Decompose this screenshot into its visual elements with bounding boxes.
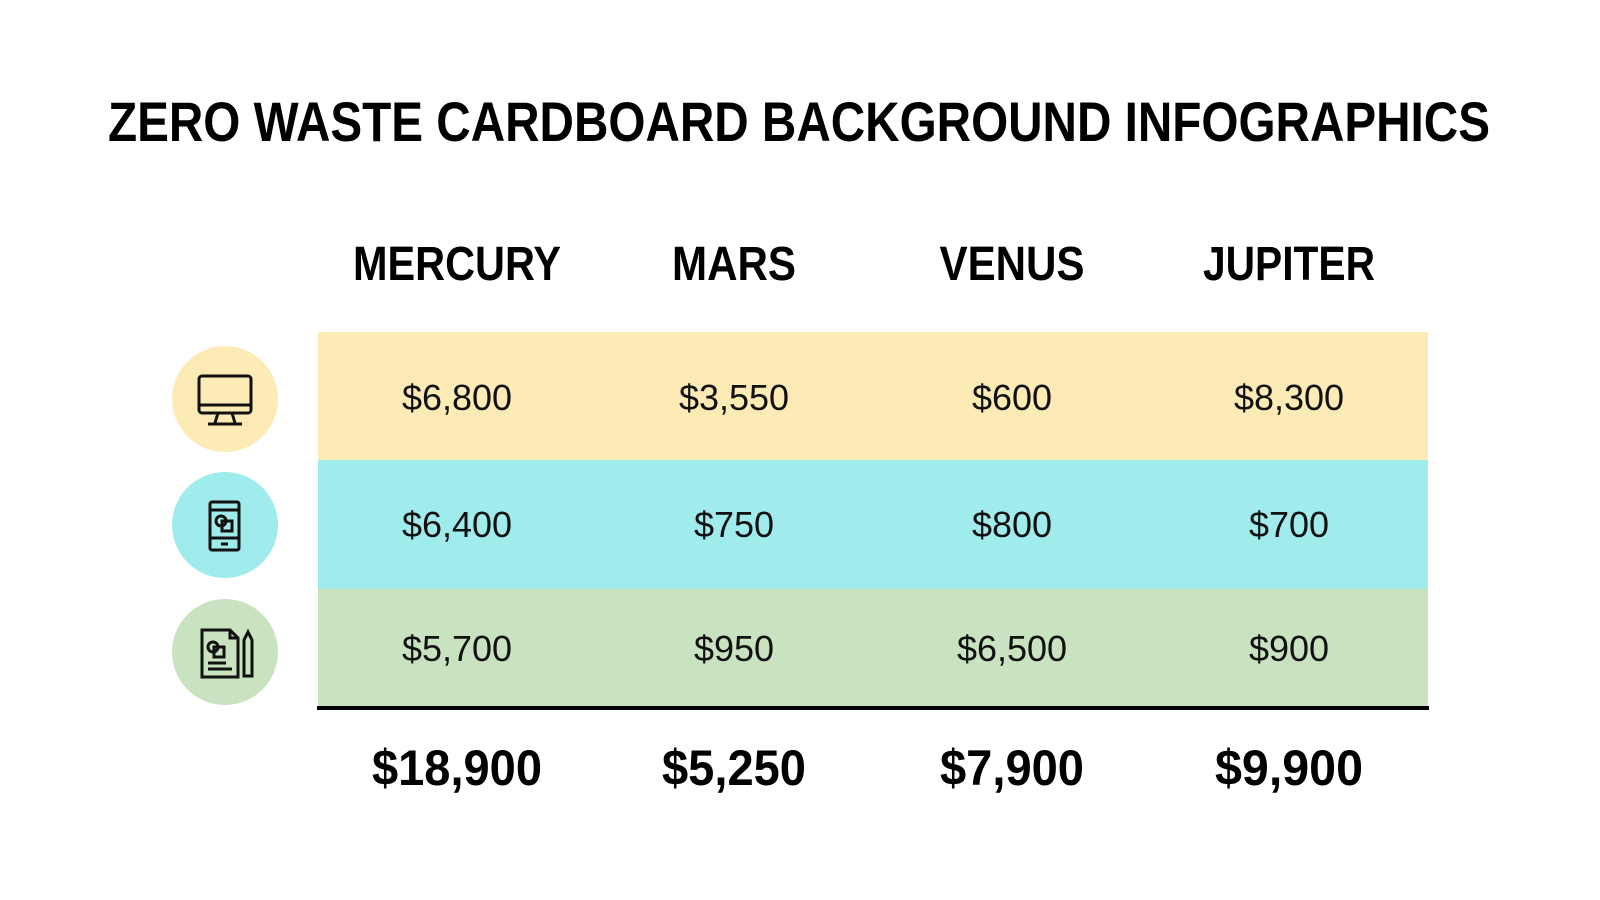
- values: $750: [694, 504, 774, 545]
- totals: $9,900: [1215, 740, 1363, 796]
- row: yellow: [318, 332, 1428, 460]
- totals: $7,900: [940, 740, 1084, 796]
- values: $600: [972, 377, 1052, 418]
- values: $900: [1249, 628, 1329, 669]
- column headers: [353, 238, 1375, 291]
- column headers: MARS: [672, 238, 796, 291]
- values: $3,550: [679, 377, 789, 418]
- row: green: [318, 589, 1428, 707]
- icon: document with pencil: [172, 599, 278, 705]
- values: $5,700: [402, 628, 512, 669]
- column headers: JUPITER: [1203, 238, 1375, 291]
- column headers: MERCURY: [353, 238, 561, 291]
- totals: [372, 740, 1363, 796]
- icon: phone: [172, 472, 278, 578]
- column headers: VENUS: [940, 238, 1084, 291]
- table: [317, 332, 1429, 710]
- values: $6,400: [402, 504, 512, 545]
- values: $6,800: [402, 377, 512, 418]
- values: [402, 377, 1344, 669]
- values: $8,300: [1234, 377, 1344, 418]
- totals: $5,250: [662, 740, 806, 796]
- totals: $18,900: [372, 740, 542, 796]
- values: $700: [1249, 504, 1329, 545]
- values: $950: [694, 628, 774, 669]
- row: cyan: [318, 460, 1428, 589]
- values: $6,500: [957, 628, 1067, 669]
- values: $800: [972, 504, 1052, 545]
- icon: monitor: [172, 346, 278, 452]
